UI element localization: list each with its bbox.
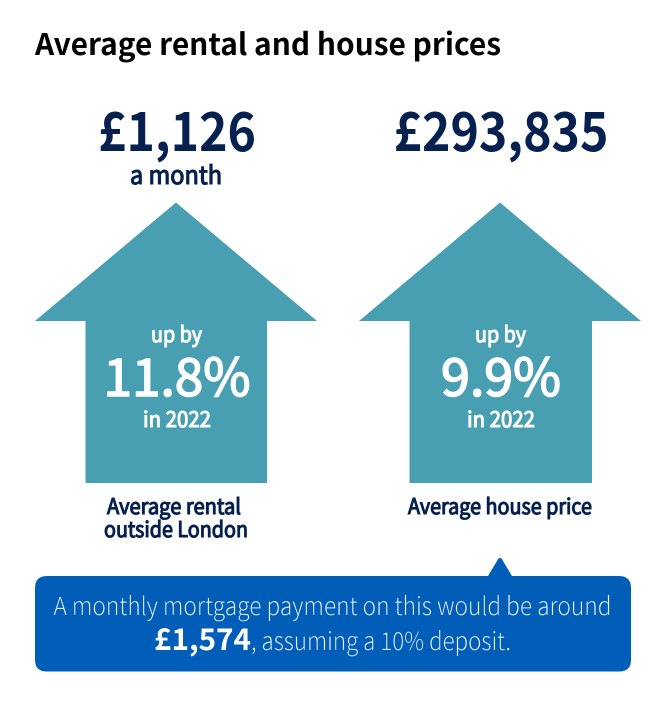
- rental caption: outside London: [104, 513, 248, 544]
- rental in 2022: in 2022: [143, 403, 211, 434]
- callout text line 2: , assuming a 10% deposit.: [251, 622, 511, 658]
- rental price: £1,126: [98, 88, 256, 167]
- callout text line 1: A monthly mortgage payment on this would be around: [54, 587, 612, 623]
- rental percentage: 11.8%: [104, 336, 250, 411]
- house caption: Average house price: [408, 490, 592, 521]
- rental up by: up by: [151, 318, 202, 349]
- icon: rental house arrow: [35, 202, 317, 483]
- title: Average rental and house prices: [34, 20, 501, 64]
- panel: rental: [35, 88, 317, 544]
- icon: house price arrow: [359, 202, 641, 483]
- callout text line 2: £1,574: [154, 615, 251, 659]
- callout: [35, 558, 631, 672]
- house price value: £293,835: [394, 88, 608, 167]
- callout box with pointer: [35, 558, 631, 672]
- house up by: up by: [475, 318, 526, 349]
- rental caption: Average rental: [107, 490, 241, 521]
- house percentage: 9.9%: [441, 336, 561, 411]
- a month label: a month: [130, 157, 222, 192]
- house in 2022: in 2022: [467, 403, 535, 434]
- panel: house price: [359, 88, 641, 521]
